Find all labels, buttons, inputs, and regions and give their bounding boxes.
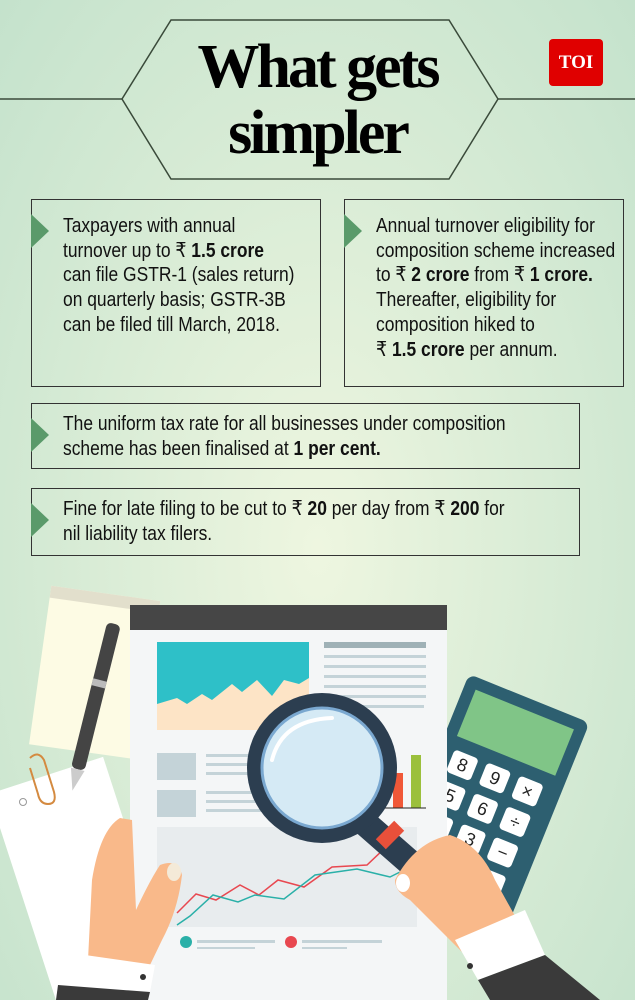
line chart	[177, 848, 385, 913]
panel: uniform tax rate: The uniform tax rate for all businesses under composition	[63, 412, 506, 435]
panel: late filing fine: nil liability tax filers.	[63, 522, 212, 545]
calculator: 2	[429, 815, 446, 838]
calculator: −	[494, 841, 511, 864]
loose paper	[0, 757, 177, 1000]
calculator: 6	[474, 798, 491, 820]
title	[198, 33, 439, 167]
panel: uniform tax rate: scheme has been finalised at 1 per cent.	[63, 437, 381, 460]
panel: composition eligibility: ₹ 1.5 crore per annum.	[376, 338, 558, 361]
panel: uniform tax rate	[31, 403, 580, 469]
panel: quarterly filing: can be filed till March, 2018.	[63, 313, 280, 336]
calculator: ×	[519, 780, 536, 803]
panel: quarterly filing	[31, 199, 321, 387]
calculator: 3	[462, 828, 479, 851]
notepad	[29, 586, 160, 760]
report sheet	[130, 605, 447, 1000]
left hand	[56, 818, 182, 1000]
title: What gets	[198, 33, 437, 101]
calculator: 9	[486, 767, 503, 789]
panel: composition eligibility: composition scheme increased	[376, 239, 615, 262]
panel: quarterly filing: turnover up to ₹ 1.5 crore	[63, 239, 264, 262]
pen	[66, 622, 121, 792]
calculator: +	[449, 859, 466, 881]
panel: late filing fine: Fine for late filing to be cut to ₹ 20 per day from ₹ 200 for	[63, 497, 505, 520]
panel: composition eligibility: composition hiked to	[376, 313, 535, 336]
title: simpler	[228, 99, 407, 167]
calculator: ÷	[507, 811, 523, 833]
title hexagon	[0, 19, 635, 180]
panel: quarterly filing: can file GSTR-1 (sales return)	[63, 263, 294, 286]
panel: late filing fine	[31, 488, 580, 556]
right hand	[395, 835, 600, 1000]
calculator	[383, 674, 590, 936]
panel: quarterly filing: on quarterly basis; GSTR-3B	[63, 288, 286, 311]
calculator: 5	[442, 785, 458, 807]
paper clip	[30, 754, 55, 804]
magnifier	[247, 693, 455, 902]
logo: TOI: TOI	[559, 52, 593, 73]
logo: TOI	[549, 39, 603, 86]
illustration: hands holding report with magnifier	[0, 586, 600, 1000]
bar chart	[325, 755, 426, 808]
panel: composition eligibility: to ₹ 2 crore from ₹ 1 crore.	[376, 263, 593, 286]
panel: composition eligibility: Thereafter, eligibility for	[376, 288, 556, 311]
panel: composition eligibility	[344, 199, 624, 387]
calculator: 8	[454, 754, 471, 776]
panel: quarterly filing: Taxpayers with annual	[63, 214, 235, 237]
panel: composition eligibility: Annual turnover eligibility for	[376, 214, 595, 237]
calculator: =	[482, 872, 499, 894]
